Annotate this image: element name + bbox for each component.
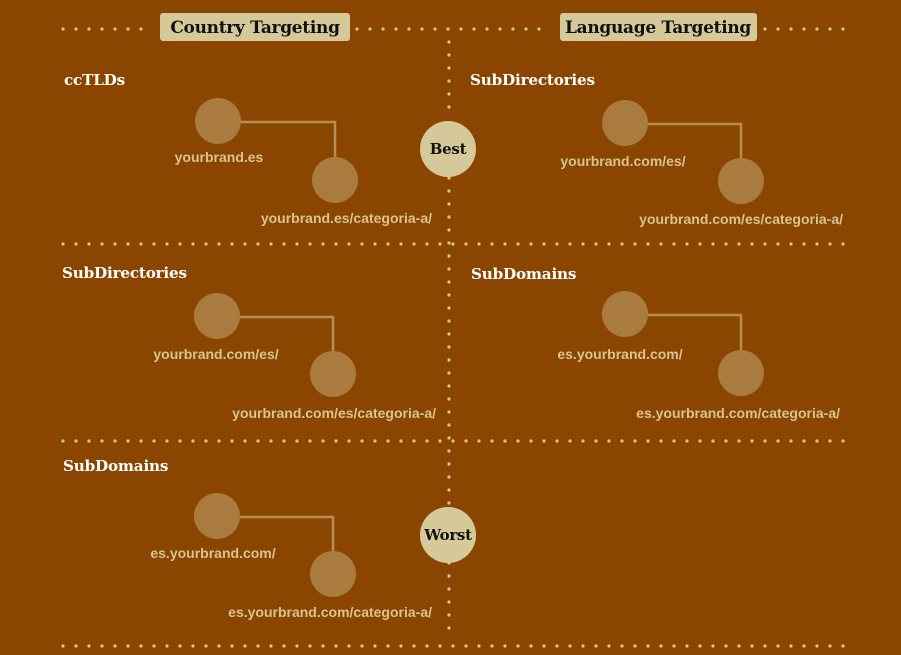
panel: language SubDomains [471,265,840,421]
panel: language SubDirectories: SubDirectories [470,71,595,89]
panel: ccTLDs: ccTLDs [64,71,125,89]
panel: language SubDomains: es.yourbrand.com/categoria-a/ [636,405,840,421]
panel: language SubDirectories: yourbrand.com/es/categoria-a/ [639,211,843,227]
panel: country SubDirectories: yourbrand.com/es/ [153,346,279,362]
panel: ccTLDs: yourbrand.es/categoria-a/ [261,210,432,226]
panel: country SubDomains: es.yourbrand.com/categoria-a/ [228,604,432,620]
badge: Worst [420,507,476,563]
header: Country Targeting [160,13,350,41]
header: Country Targeting: Country Targeting [170,18,340,38]
panel: country SubDirectories: yourbrand.com/es/categoria-a/ [232,405,436,421]
panel: language SubDomains: es.yourbrand.com/ [557,346,683,362]
panel: country SubDomains: es.yourbrand.com/ [150,545,276,561]
panel: language SubDomains: SubDomains [471,265,576,283]
panel: country SubDomains: SubDomains [63,457,168,475]
header: Language Targeting [560,13,757,41]
panel: ccTLDs: yourbrand.es [175,149,264,165]
badge: Worst: Worst [423,526,472,544]
badge: Best: Best [430,140,467,158]
panel: language SubDirectories: yourbrand.com/es/ [560,153,686,169]
header: Language Targeting: Language Targeting [565,18,751,38]
panel: ccTLDs [64,71,432,226]
badge: Best [420,121,476,177]
panel: country SubDirectories [62,264,436,421]
panel: country SubDomains [63,457,432,620]
panel: language SubDirectories [470,71,843,227]
panel: country SubDirectories: SubDirectories [62,264,187,282]
